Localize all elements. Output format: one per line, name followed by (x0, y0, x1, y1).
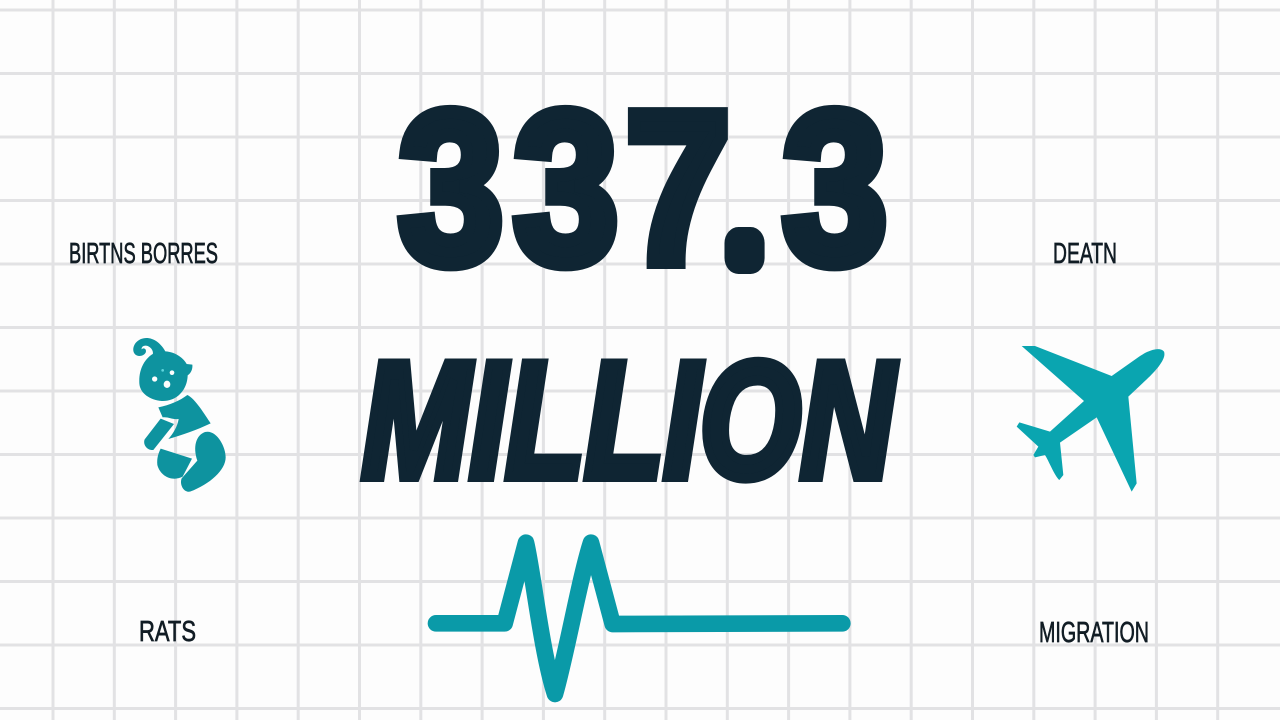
icon: airplane (1017, 346, 1164, 492)
headline number: 3 (783, 68, 887, 308)
icon: baby (133, 338, 226, 492)
headline number: 337 (399, 68, 730, 308)
headline number: . (733, 167, 757, 279)
label: births: BIRTNS BORRES (69, 238, 218, 270)
icon: heartbeat line (436, 543, 842, 694)
label: migration: MIGRATION (1039, 617, 1149, 649)
label: death: DEATN (1053, 238, 1117, 270)
label: rates: RATS (139, 616, 196, 648)
headline unit: MILLION (362, 328, 896, 512)
